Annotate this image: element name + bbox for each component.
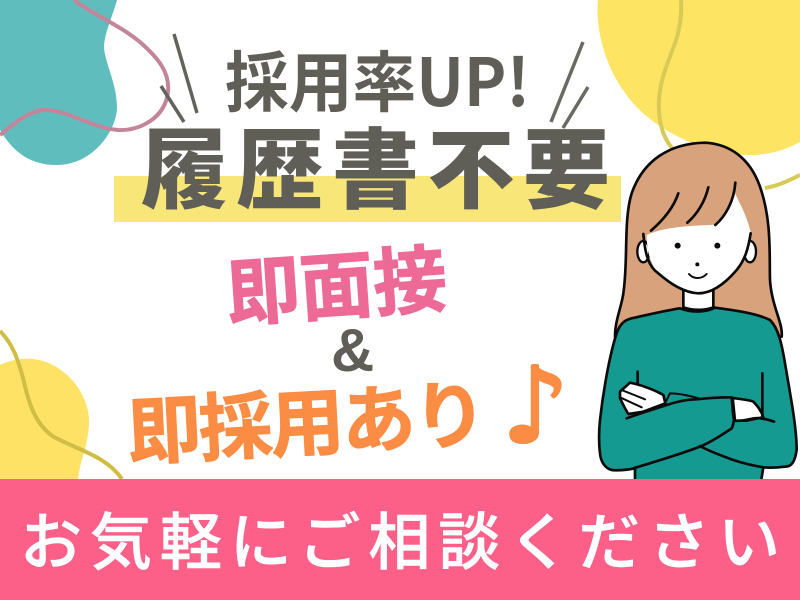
blob: yellow top right [598, 0, 800, 155]
footer band [0, 479, 800, 600]
arm details [638, 372, 774, 467]
curve: olive line bottom left [0, 331, 122, 479]
sweater body [599, 308, 797, 482]
curve: pink line top left [0, 0, 168, 135]
decorative accent lines left [161, 34, 197, 122]
text: 即面接: 即面接 [222, 220, 450, 342]
neck [683, 288, 713, 310]
heading: 履歴書不要: 履歴書不要 [141, 101, 610, 227]
music note: ♪ [502, 345, 569, 467]
hand right [733, 398, 763, 421]
decorative accent lines right [551, 42, 588, 128]
curve: olive line top right [659, 0, 800, 188]
finger lines [620, 391, 700, 407]
crossed forearm [627, 397, 734, 468]
ampersand: & [331, 317, 374, 384]
heading: 採用率UP!: 採用率UP! [225, 30, 530, 126]
character: woman with crossed arms [599, 143, 797, 482]
blob: teal top left [0, 0, 117, 165]
bangs strands [651, 183, 735, 231]
ear right [744, 241, 756, 262]
blob: yellow bottom left [0, 359, 89, 480]
forearm outline [627, 397, 734, 468]
text: 即採用あり: 即採用あり [124, 355, 489, 481]
highlight bar behind heading [114, 176, 621, 222]
ear left [637, 241, 649, 262]
face outline [643, 233, 751, 293]
footer text: お気軽にご相談ください [20, 492, 780, 582]
eyes and nose [675, 243, 720, 266]
hand left fingers [620, 383, 665, 414]
hair [615, 143, 782, 337]
face [647, 193, 751, 293]
mouth [689, 274, 707, 278]
